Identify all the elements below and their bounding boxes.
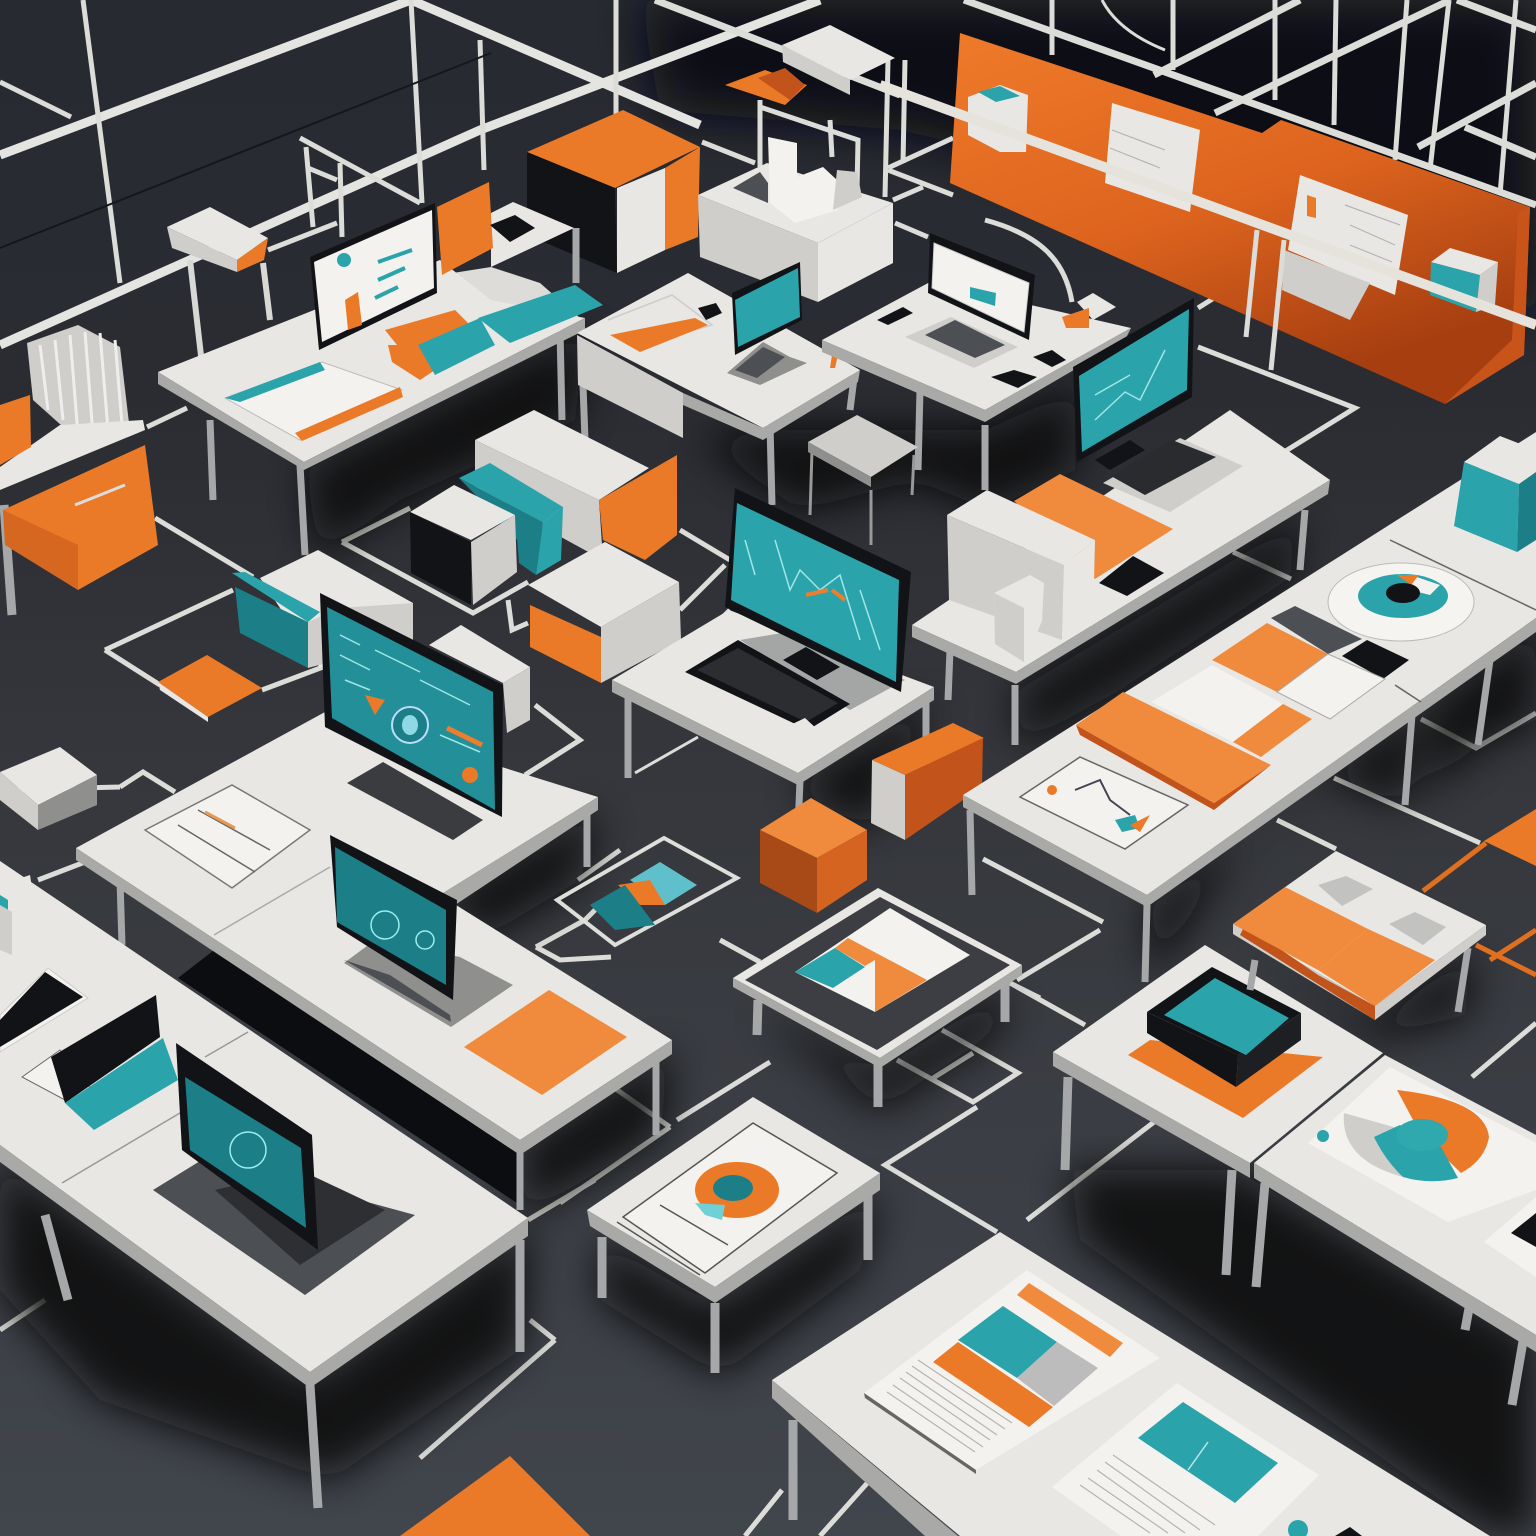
document with color blocks: [864, 1270, 1160, 1474]
central box cluster: [410, 410, 681, 683]
lamp stand: [167, 207, 270, 373]
wide monitor: [310, 203, 437, 350]
orange floor tile: [158, 655, 262, 722]
small stool: [808, 415, 918, 545]
document with teal block: [1052, 1383, 1319, 1536]
table with printer and orange sheet: [912, 298, 1330, 745]
bottom-left large desk: [76, 593, 672, 1210]
large monitor: [320, 593, 503, 817]
teal and white box left: [0, 550, 530, 830]
table with laptop: [822, 220, 1131, 490]
left shelf with orange cabinet: [0, 395, 158, 615]
printer box: [947, 490, 1095, 662]
front-left desk: [0, 861, 528, 1508]
white pedestal with device: [698, 137, 893, 302]
central dark square table: [733, 888, 1022, 1107]
overhead projector: [725, 25, 895, 105]
corner laptop: [1484, 1197, 1536, 1277]
donut chart disc: [1328, 563, 1474, 641]
orange panel bottom: [400, 1456, 590, 1536]
teal box: [1454, 436, 1536, 552]
wall documents: [968, 85, 1498, 320]
black gap between desks: [178, 944, 520, 1205]
table shadows: [0, 330, 1536, 1536]
table with central monitor: [612, 488, 984, 840]
folder pieces: [478, 285, 603, 343]
document: [225, 362, 402, 440]
wall grid lines: [0, 0, 1536, 345]
stack of books: [27, 325, 129, 442]
side boxes: [0, 875, 40, 958]
back orange cube: [527, 110, 700, 273]
orange-topped small table: [1233, 809, 1536, 1020]
table with wide monitor, top left: [158, 182, 603, 555]
central monitor screen: [725, 488, 911, 692]
floor artwork tile: [557, 838, 737, 945]
table with orange sheet and black device: [1053, 945, 1536, 1405]
orange cube on floor: [760, 798, 867, 913]
bottom document table: [772, 1232, 1490, 1536]
teal tablet: [22, 995, 178, 1130]
small white cube: [0, 747, 97, 830]
pie chart document: [1308, 1067, 1536, 1222]
chart sheet on desk: [145, 785, 310, 888]
orange back wall: [880, 33, 1536, 404]
orange box under table: [871, 723, 984, 840]
dark rear corner: [640, 0, 1536, 320]
colour block sheet: [795, 908, 970, 1012]
table with small monitor: [577, 262, 860, 505]
wall rail: [880, 85, 1536, 325]
front-left monitor: [176, 1043, 318, 1250]
angled monitor: [1073, 298, 1194, 470]
small document table: [587, 1097, 880, 1373]
long right table: [963, 432, 1536, 982]
